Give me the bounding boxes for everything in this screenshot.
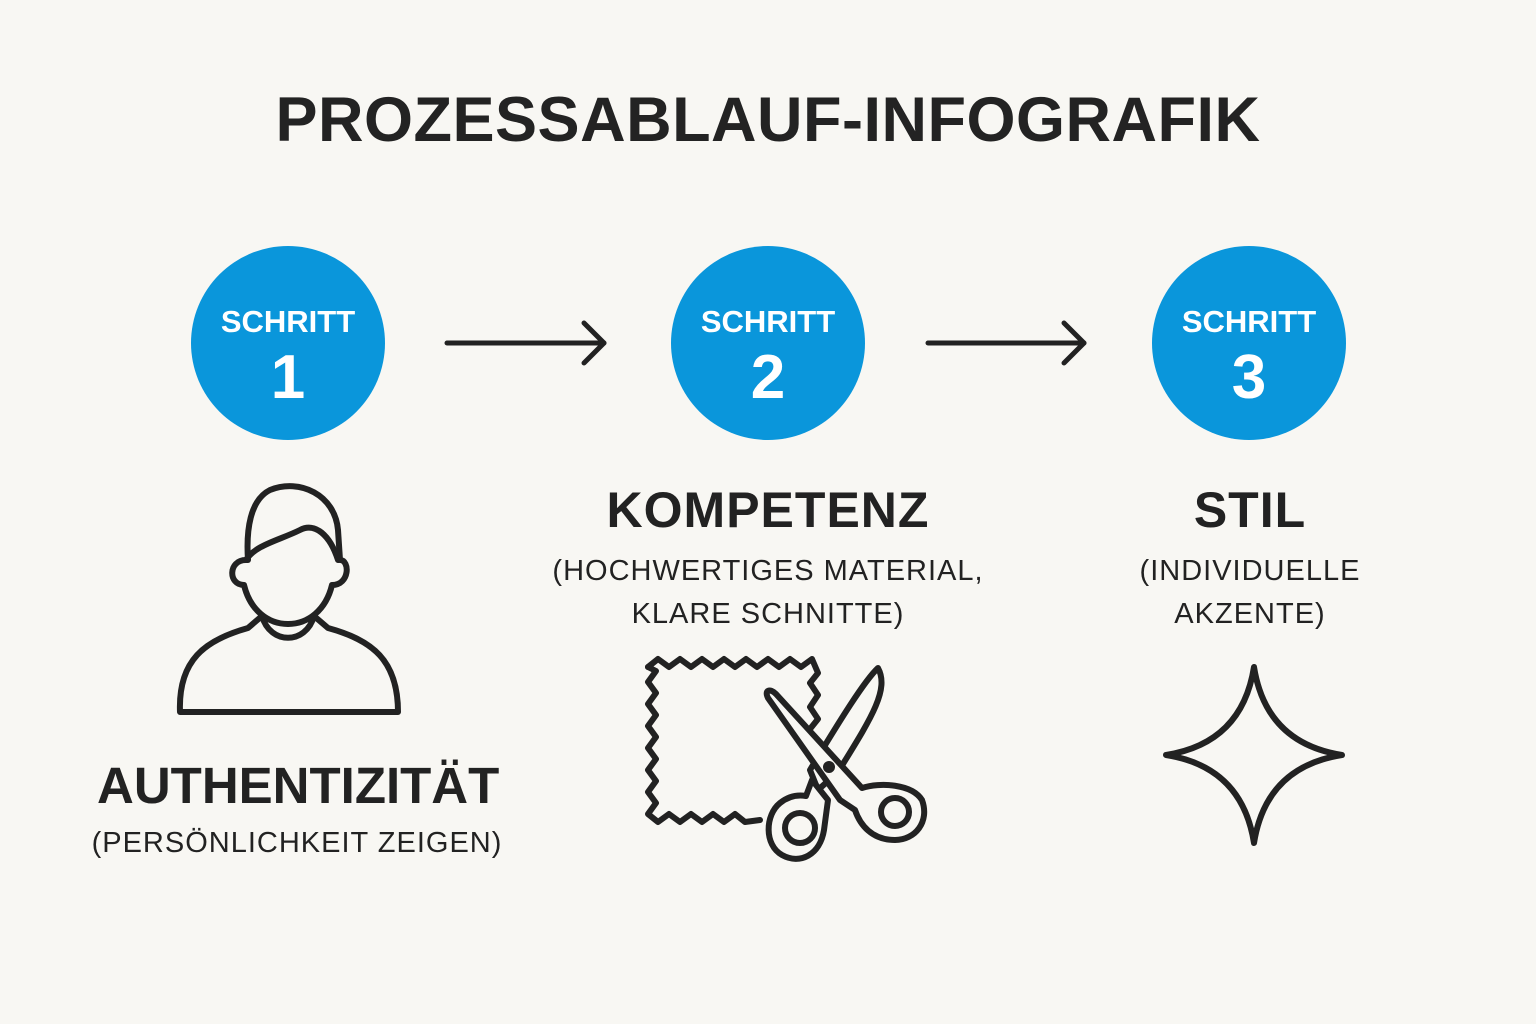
arrow 1 (447, 323, 604, 363)
title: PROZESSABLAUF-INFOGRAFIK (276, 85, 1260, 155)
arrow 2 (928, 323, 1084, 363)
step 3 circle: 3 (1232, 343, 1266, 412)
step 2 circle: SCHRITT (701, 304, 835, 339)
step 3 circle (1152, 246, 1346, 440)
icon: sparkle (1166, 667, 1342, 843)
text: Kompetenz description: KLARE SCHNITTE) (632, 598, 904, 630)
step 3 circle: SCHRITT (1182, 304, 1316, 339)
step 1 circle (191, 246, 385, 440)
step 2 circle (671, 246, 865, 440)
icon: person (180, 486, 398, 712)
text: Stil description: (INDIVIDUELLE (1140, 555, 1360, 587)
text: Kompetenz description (552, 555, 984, 630)
heading: Kompetenz: KOMPETENZ (607, 482, 929, 538)
step 2 circle: 2 (751, 343, 785, 412)
text: Persönlichkeit zeigen: (PERSÖNLICHKEIT ZEIGEN) (92, 827, 502, 859)
text: Stil description (1140, 555, 1360, 630)
step 1 circle: 1 (271, 343, 305, 412)
text: Kompetenz description: (HOCHWERTIGES MATERIAL, (552, 555, 984, 587)
text: Stil description: AKZENTE) (1174, 598, 1326, 630)
icon: fabric and scissors (648, 659, 924, 859)
step 1 circle: SCHRITT (221, 304, 355, 339)
heading: Authentizität: AUTHENTIZITÄT (97, 757, 499, 814)
heading: Stil: STIL (1194, 482, 1306, 538)
